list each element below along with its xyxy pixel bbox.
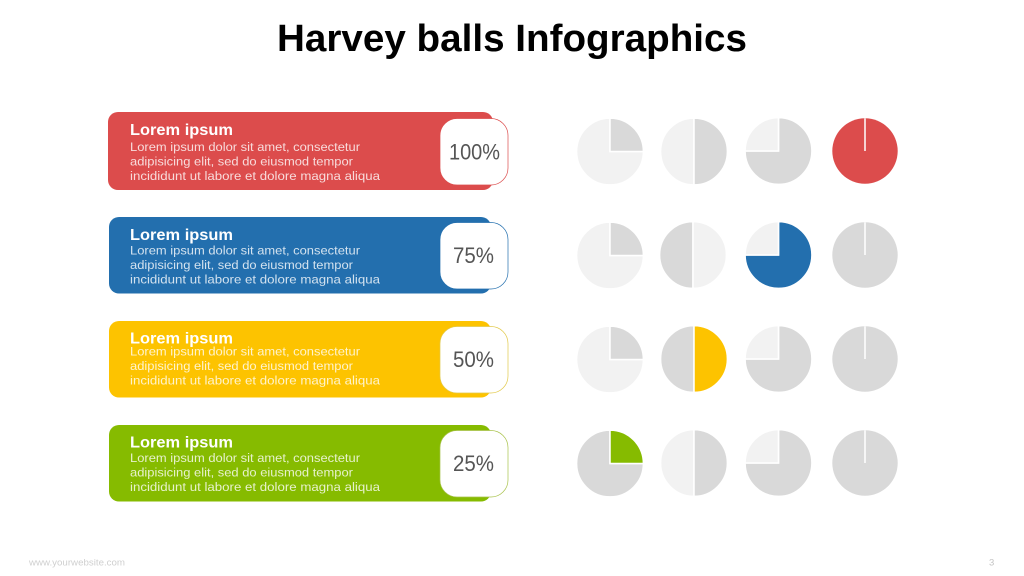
- red body text: [130, 140, 380, 183]
- ball row 4 col 4: 100% grey: [832, 430, 898, 496]
- red bar: [108, 112, 493, 190]
- title: Harvey balls Infographics: [277, 18, 747, 60]
- red heading: Lorem ipsum: [130, 122, 233, 139]
- panel: 50% yellow row: [109, 321, 508, 398]
- blue value: 75%: [453, 243, 494, 268]
- blue body text: incididunt ut labore et dolore magna aliqua: [130, 272, 380, 286]
- red body text: Lorem ipsum dolor sit amet, consectetur: [130, 140, 360, 154]
- panel: 100% red row: [108, 112, 508, 190]
- green body text: Lorem ipsum dolor sit amet, consectetur: [130, 451, 360, 465]
- yellow heading: Lorem ipsum: [130, 330, 233, 348]
- yellow body text: [130, 344, 380, 388]
- blue body text: [130, 244, 380, 286]
- red body text: incididunt ut labore et dolore magna aliqua: [130, 169, 380, 183]
- red value box: [440, 118, 508, 185]
- ball row 1 col 1: 25% grey: [577, 118, 643, 185]
- panel: 25% green row: [109, 425, 508, 502]
- ball row 4 col 3: 75% grey: [745, 430, 812, 496]
- blue body text: adipisicing elit, sed do eiusmod tempor: [130, 258, 353, 272]
- green bar: [109, 425, 491, 502]
- green body text: [130, 451, 380, 494]
- ball row 2 col 3: 75% blue: [745, 222, 812, 288]
- yellow body text: Lorem ipsum dolor sit amet, consectetur: [130, 344, 360, 358]
- footer website: www.yourwebsite.com: [28, 558, 125, 568]
- red body text: adipisicing elit, sed do eiusmod tempor: [130, 154, 353, 168]
- ball row 1 col 2: 50% grey: [661, 118, 727, 185]
- page number: 3: [989, 558, 994, 568]
- ball row 3 col 1: 25% grey: [577, 326, 643, 393]
- green value box: [440, 430, 508, 497]
- ball row 1 col 4: 100% red: [832, 118, 898, 184]
- Harvey ball grid: [577, 118, 898, 497]
- blue value box: [440, 222, 508, 289]
- ball row 2 col 4: 100% grey: [832, 222, 898, 288]
- ball row 3 col 2: 50% yellow: [661, 326, 727, 392]
- ball row 4 col 2: 50% grey: [661, 430, 727, 496]
- blue bar: [109, 217, 491, 294]
- green body text: adipisicing elit, sed do eiusmod tempor: [130, 466, 353, 480]
- green value: 25%: [453, 451, 494, 476]
- yellow body text: incididunt ut labore et dolore magna aliqua: [130, 374, 380, 388]
- ball row 4 col 1: 25% green: [577, 430, 643, 497]
- blue heading: Lorem ipsum: [130, 227, 233, 244]
- yellow bar: [109, 321, 491, 398]
- ball row 1 col 3: 75% grey: [745, 118, 812, 184]
- ball row 3 col 4: 100% grey: [832, 326, 898, 392]
- yellow value box: [440, 326, 508, 393]
- red value: 100%: [449, 140, 500, 164]
- ball row 2 col 2: 50% grey: [660, 222, 726, 288]
- green heading: Lorem ipsum: [130, 434, 233, 452]
- blue body text: Lorem ipsum dolor sit amet, consectetur: [130, 244, 360, 258]
- panel: 75% blue row: [109, 217, 508, 294]
- ball row 3 col 3: 75% grey: [745, 326, 812, 392]
- ball row 2 col 1: 25% grey: [577, 222, 643, 289]
- green body text: incididunt ut labore et dolore magna aliqua: [130, 480, 380, 494]
- yellow body text: adipisicing elit, sed do eiusmod tempor: [130, 359, 353, 373]
- yellow value: 50%: [453, 347, 494, 372]
